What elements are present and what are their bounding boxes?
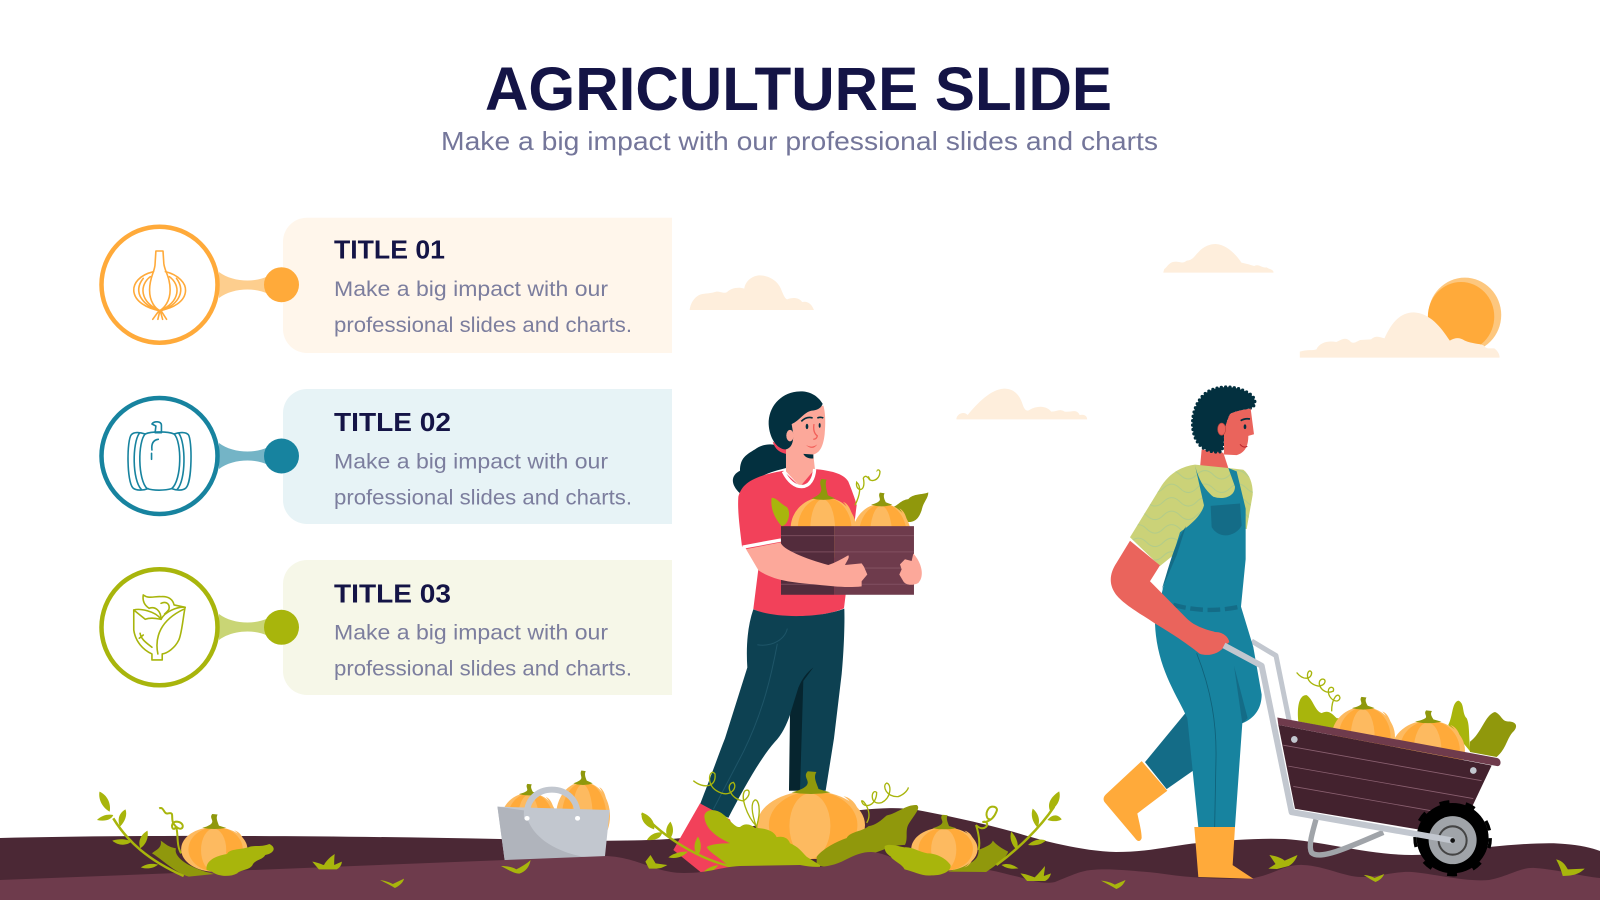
body text 03: Make a big impact with our	[334, 621, 608, 645]
forearm and hands	[746, 542, 922, 587]
panel: title 01 item	[102, 218, 672, 353]
woman carrying crate	[673, 391, 928, 874]
boot	[673, 803, 747, 874]
back leg	[1145, 711, 1193, 789]
sleeve stripe	[743, 540, 781, 547]
crate pumpkins	[771, 479, 928, 568]
hub	[1450, 838, 1455, 843]
neck	[1200, 449, 1228, 478]
tray lines	[1283, 745, 1482, 811]
tray	[1278, 725, 1492, 831]
big pumpkin	[757, 771, 865, 859]
body text 02	[334, 449, 632, 509]
sprouts	[312, 854, 1585, 889]
body text 03	[334, 621, 632, 681]
hair tie	[773, 442, 786, 454]
vine	[996, 807, 1054, 865]
ground: back dark soil	[0, 808, 1600, 900]
pocket seam	[713, 629, 787, 809]
title 01 heading: TITLE 01	[334, 235, 445, 265]
ear	[786, 430, 794, 441]
panel: title 02 item	[102, 389, 672, 524]
green leaf	[885, 845, 951, 876]
panel: title 03 item	[102, 560, 672, 695]
sun	[1428, 278, 1501, 352]
face	[1224, 409, 1254, 455]
hair	[1193, 387, 1255, 452]
curl	[976, 807, 997, 850]
collar	[783, 469, 815, 487]
front boot	[1194, 827, 1253, 879]
bucket body	[497, 790, 610, 863]
crate	[781, 526, 914, 595]
ponytail	[733, 444, 786, 493]
hair	[769, 391, 823, 449]
green leaf	[206, 844, 274, 876]
icon: cabbage	[134, 595, 185, 660]
load pumpkins	[1332, 697, 1465, 780]
clouds and sun	[690, 244, 1501, 419]
bucket pumpkins	[501, 770, 610, 850]
body text 01: Make a big impact with our	[334, 277, 608, 301]
load curl	[1297, 671, 1340, 711]
shirt waves	[1130, 471, 1263, 560]
neck and face	[786, 405, 825, 487]
overalls	[1155, 465, 1262, 827]
olive leaf	[948, 841, 1008, 872]
curls around big pumpkin	[693, 772, 908, 828]
olive leaf	[817, 805, 918, 867]
dot 01	[264, 267, 299, 302]
back boot	[1104, 761, 1167, 841]
bucket with pumpkins	[497, 770, 610, 863]
trousers	[700, 609, 844, 818]
tray rim	[1277, 717, 1501, 766]
subtitle: Make a big impact with our professional slides and charts	[441, 126, 1158, 156]
foreground vine near boot	[642, 813, 735, 873]
facial features	[1218, 419, 1250, 447]
barrow back handle	[1252, 641, 1289, 722]
body text 02: Make a big impact with our	[334, 449, 608, 473]
overalls shading	[1162, 504, 1248, 723]
wheelbarrow stand	[1310, 820, 1383, 855]
clouds	[690, 244, 1500, 419]
ring 01	[102, 227, 218, 343]
load leaves	[1298, 695, 1516, 757]
body text 01: professional slides and charts.	[334, 313, 632, 337]
belt	[1173, 605, 1240, 610]
title 03 heading: TITLE 03	[334, 578, 451, 608]
body text 01	[334, 277, 632, 337]
facial features	[801, 417, 823, 459]
icon: pumpkin	[128, 422, 191, 490]
ground: front soil	[0, 852, 1600, 900]
foliage by woman	[704, 805, 918, 874]
vine leaflets	[1002, 791, 1062, 869]
right pumpkin group	[885, 791, 1062, 876]
dot 03	[264, 610, 299, 645]
title: AGRICULTURE SLIDE	[485, 55, 1112, 123]
olive leaf	[152, 841, 214, 877]
card background 01	[283, 218, 672, 353]
connector 03	[219, 614, 268, 640]
arm	[1111, 541, 1229, 655]
dark inner leg	[789, 667, 813, 791]
dot 02	[264, 438, 299, 474]
icon: onion	[134, 251, 186, 319]
sprouts right	[1020, 855, 1585, 889]
left pumpkin	[181, 814, 247, 872]
card background 02	[283, 389, 672, 524]
body text 03: professional slides and charts.	[334, 657, 632, 681]
vine curl	[159, 808, 183, 853]
shirt	[1130, 465, 1253, 566]
rivets	[1291, 736, 1477, 774]
body text 02: professional slides and charts.	[334, 485, 632, 509]
ring 02	[102, 398, 218, 514]
man with wheelbarrow	[1104, 387, 1516, 879]
wheel	[1415, 802, 1490, 875]
crate curl	[855, 470, 880, 505]
connector 02	[219, 443, 268, 469]
green leaf	[704, 810, 820, 874]
connector 01	[219, 272, 268, 298]
leg seams	[1197, 653, 1216, 827]
left pumpkin vine	[97, 792, 274, 877]
frame	[1224, 645, 1453, 840]
ring 03	[102, 569, 218, 685]
vine with leaflets	[97, 792, 184, 876]
sprouts left	[312, 854, 667, 888]
card background 03	[283, 560, 672, 695]
title 02 heading: TITLE 02	[334, 407, 451, 437]
wheelbarrow	[1224, 645, 1516, 875]
pumpkin	[911, 815, 978, 871]
shirt	[738, 469, 857, 617]
